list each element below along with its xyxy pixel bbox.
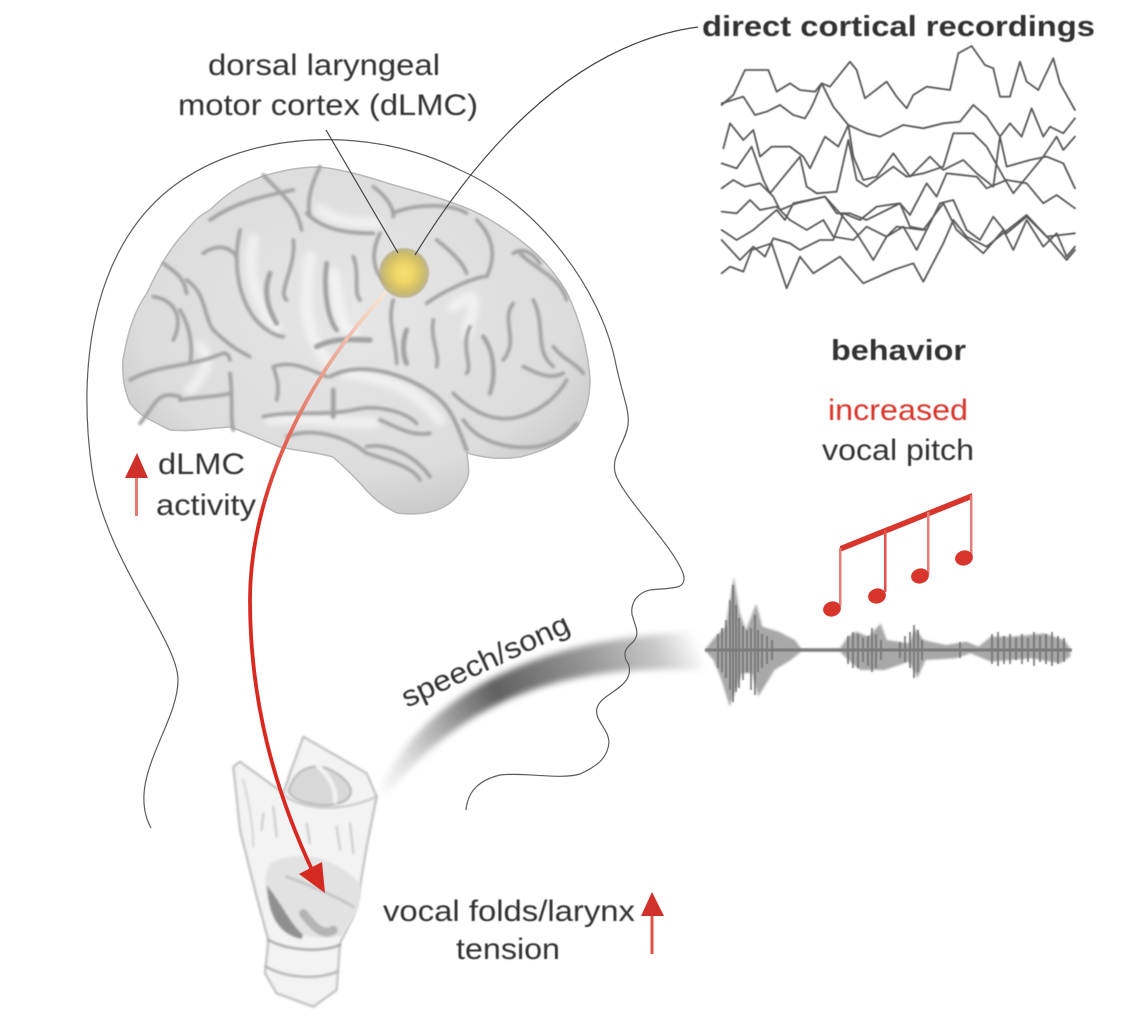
brain — [123, 167, 590, 514]
label: vocal folds/larynx tension: vocal folds/larynx — [383, 895, 635, 928]
head outline — [87, 140, 684, 828]
icon: up arrow larynx — [641, 892, 664, 954]
heading: behavior: behavior — [831, 335, 966, 367]
larynx — [233, 737, 377, 1007]
label: dLMC activity: activity — [156, 489, 256, 522]
heading: direct cortical recordings: direct cortical recordings — [702, 11, 1095, 43]
label: dLMC — [178, 49, 478, 122]
speech beam — [378, 632, 702, 796]
label: increased vocal pitch: vocal pitch — [822, 434, 974, 467]
chart: cortical traces — [722, 46, 1075, 288]
label: dLMC activity: dLMC — [158, 448, 245, 481]
arrow: brain to larynx — [250, 292, 387, 893]
icon: up arrow dLMC — [125, 453, 148, 516]
brain folds — [130, 167, 583, 480]
label: dLMC: motor cortex (dLMC) — [178, 89, 478, 122]
label: increased vocal pitch — [822, 394, 974, 467]
cortical site glow — [378, 247, 430, 299]
label: vocal folds/larynx tension — [383, 895, 635, 966]
label: speech/song: speech/song — [396, 608, 575, 714]
label: increased vocal pitch: increased — [828, 394, 968, 427]
label: dLMC: dorsal laryngeal — [208, 49, 440, 82]
label: vocal folds/larynx tension: tension — [456, 933, 560, 966]
chart: audio waveform — [705, 577, 1072, 707]
label: dLMC activity — [156, 448, 256, 522]
icon: rising musical notes — [821, 493, 975, 619]
leader lines — [326, 27, 698, 255]
